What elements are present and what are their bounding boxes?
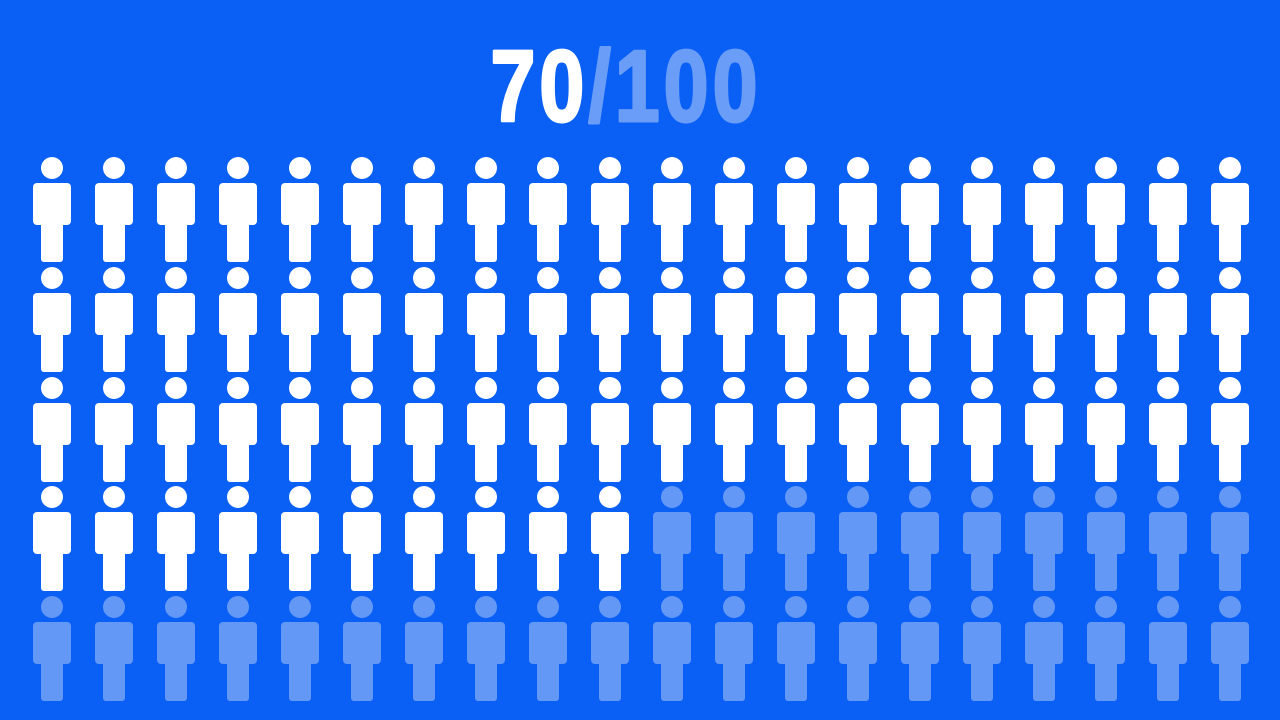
- highlighted people (70): [33, 157, 1249, 591]
- title: 70/100: 70/100: [490, 30, 762, 143]
- pictogram grid: 70 of 100 people highlighted: [33, 157, 1249, 701]
- faded people (30): [33, 486, 1249, 701]
